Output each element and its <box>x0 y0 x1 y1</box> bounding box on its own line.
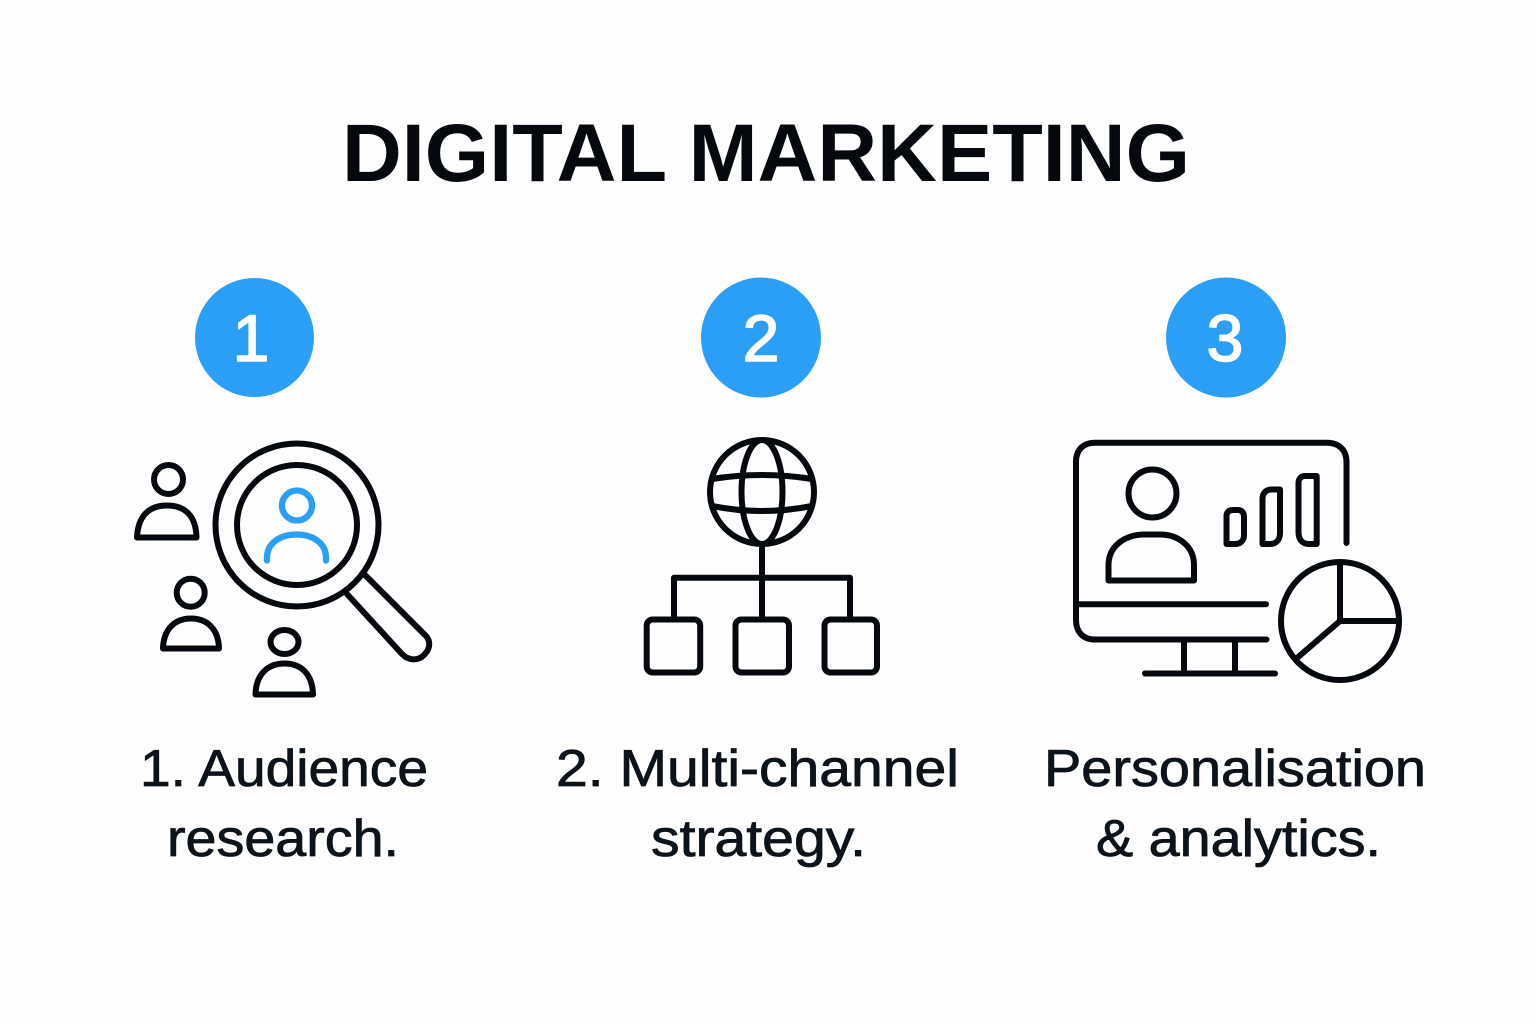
icon: magnifier <box>216 444 429 659</box>
label: audience research: research. <box>167 810 399 868</box>
connector lines <box>674 544 850 618</box>
icon: pie chart <box>1281 562 1399 680</box>
title: DIGITAL MARKETING <box>342 108 1190 199</box>
label: multi-channel strategy: 2. Multi-channel <box>556 740 959 798</box>
icon: monitor with analytics <box>1076 443 1399 680</box>
number badge 2: 2 <box>743 301 779 375</box>
icon: channel box left <box>647 620 700 672</box>
number badge 3 <box>1166 278 1286 398</box>
label: personalisation and analytics: Personalisation <box>1044 740 1426 798</box>
number badge 1: 1 <box>233 301 269 375</box>
panel: multi-channel strategy <box>556 278 959 868</box>
number badge 1 <box>195 278 314 397</box>
icon: globe network <box>647 440 877 672</box>
number badge 2 <box>701 278 821 398</box>
label: personalisation and analytics <box>1044 740 1426 868</box>
icon: profile <box>1108 470 1194 580</box>
label: personalisation and analytics: & analytics. <box>1096 810 1381 868</box>
label: multi-channel strategy <box>556 740 959 868</box>
icon: bar chart <box>1226 476 1317 544</box>
icon: magnifying glass with audience <box>137 444 429 694</box>
panel: personalisation and analytics <box>1044 278 1426 868</box>
label: audience research: 1. Audience <box>140 740 428 798</box>
icon: person middle <box>163 579 219 648</box>
icon: person top left <box>137 465 196 538</box>
label: audience research <box>140 740 428 868</box>
label: multi-channel strategy: strategy. <box>651 810 866 868</box>
panel: audience research <box>137 278 429 868</box>
icon: highlighted blue person <box>267 490 326 560</box>
icon: person bottom <box>256 630 313 694</box>
icon: monitor <box>1076 443 1346 674</box>
icon: channel box middle <box>736 620 789 672</box>
icon: channel box right <box>824 620 877 672</box>
number badge 3: 3 <box>1207 301 1243 375</box>
icon: globe <box>710 440 814 544</box>
